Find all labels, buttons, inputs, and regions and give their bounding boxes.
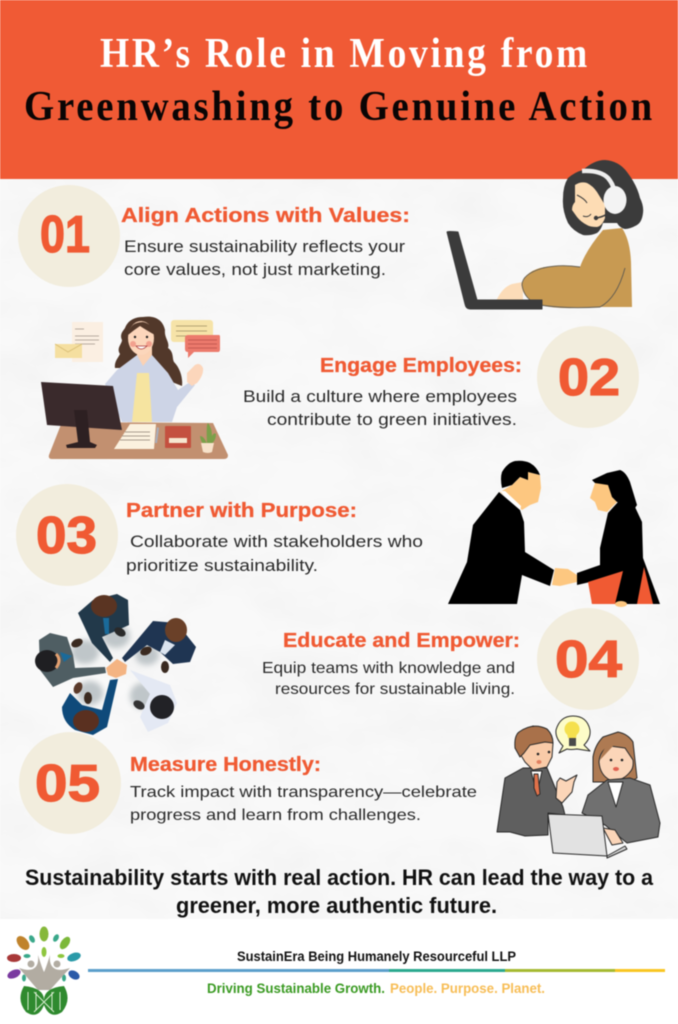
illustration: team hands together, top view: [35, 594, 196, 735]
tagline: [207, 981, 545, 996]
closing statement: Sustainability starts with real action. HR can lead the way to a: [25, 865, 654, 890]
illustration: woman with headset at laptop: [447, 160, 643, 309]
company name: SustainEra Being Humanely Resourceful LLP: [237, 949, 516, 964]
step 01: align actions with values: [18, 185, 410, 287]
title: [24, 31, 655, 130]
step 05: measure honestly: [19, 732, 477, 834]
footer: [0, 919, 678, 1024]
header banner: [0, 0, 678, 179]
step 03: partner with purpose: [16, 484, 423, 586]
step 04: educate and empower: [262, 608, 639, 710]
closing statement: greener, more authentic future.: [176, 893, 497, 918]
step 02: engage employees: Build a culture where employees: [243, 387, 517, 406]
colour divider: [88, 969, 665, 972]
step 04: educate and empower: resources for sustainable living.: [275, 681, 515, 698]
step 03: partner with purpose: Partner with Purpose:: [126, 499, 357, 522]
closing statement: [25, 865, 654, 918]
step 02: engage employees: 02: [558, 349, 620, 407]
step 05: measure honestly: 05: [35, 755, 100, 813]
step 04: educate and empower: Equip teams with knowledge and: [262, 660, 515, 677]
illustration: woman at office desk: [41, 317, 228, 459]
step 04: educate and empower: Educate and Empower:: [283, 629, 520, 652]
title: HR’s Role in Moving from: [100, 31, 590, 77]
step 01: align actions with values: Ensure sustainability reflects your: [124, 237, 405, 256]
step 02: engage employees: Engage Employees:: [320, 354, 522, 377]
step 01: align actions with values: core values, not just marketing.: [124, 260, 386, 279]
step 03: partner with purpose: Collaborate with stakeholders who: [130, 532, 423, 551]
step 03: partner with purpose: prioritize sustainability.: [126, 556, 318, 575]
tagline: Driving Sustainable Growth.: [207, 981, 385, 996]
step 04: educate and empower: 04: [555, 631, 622, 689]
illustration: business handshake: [448, 461, 660, 607]
step 02: engage employees: [243, 326, 639, 429]
step 01: align actions with values: Align Actions with Values:: [121, 204, 410, 227]
tagline: People. Purpose. Planet.: [390, 981, 545, 996]
step 05: measure honestly: progress and learn from challenges.: [130, 807, 421, 824]
step 03: partner with purpose: 03: [36, 507, 97, 565]
step 01: align actions with values: 01: [40, 206, 90, 264]
paper background: [0, 179, 678, 920]
step 05: measure honestly: Track impact with transparency—celebrate: [130, 784, 477, 801]
step 05: measure honestly: Measure Honestly:: [130, 753, 321, 776]
step 02: engage employees: contribute to green initiatives.: [267, 410, 517, 429]
illustration: two colleagues with laptop and idea: [497, 716, 660, 858]
company logo: [6, 926, 82, 1015]
